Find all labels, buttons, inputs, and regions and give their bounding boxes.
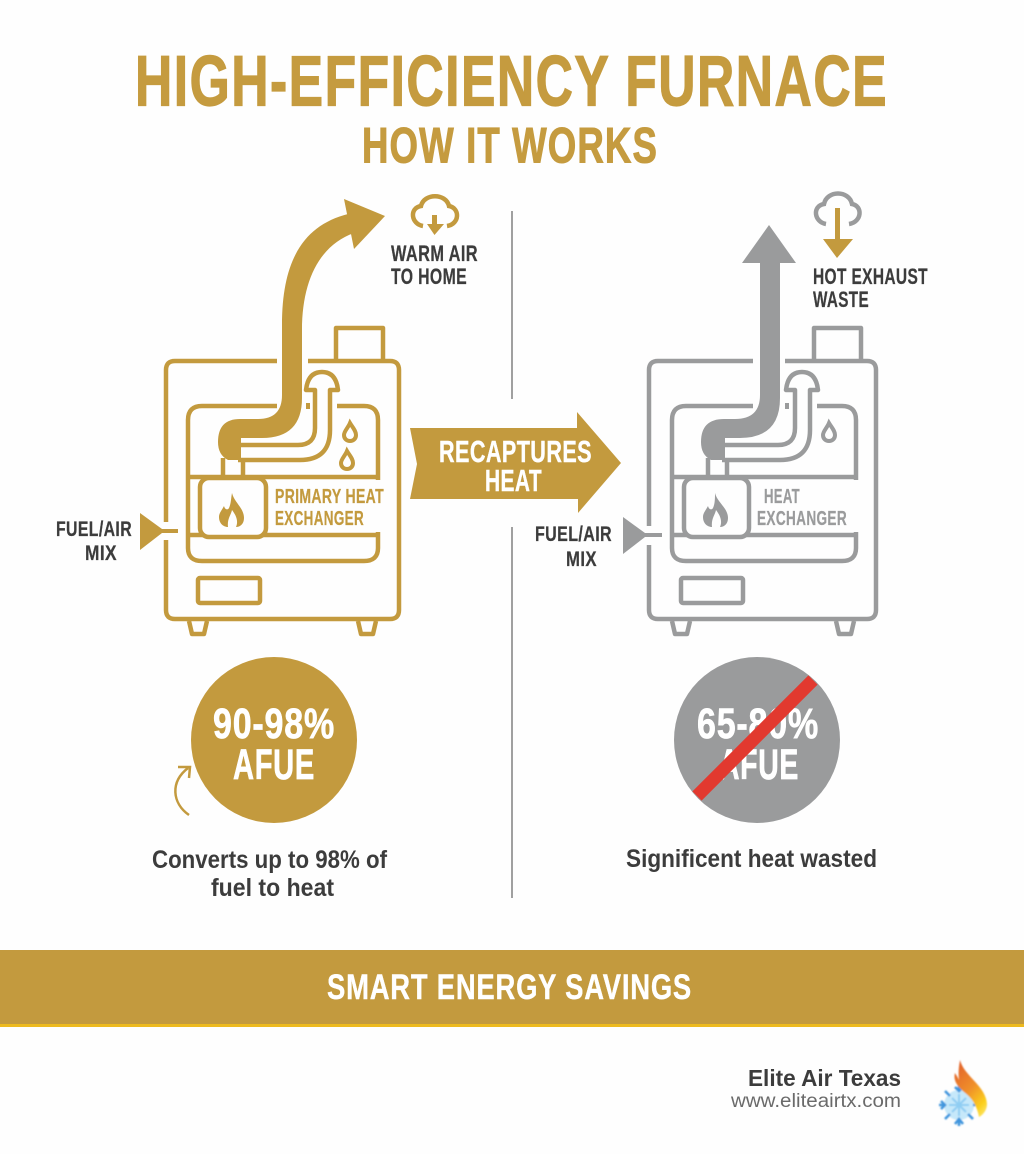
exhaust tube with arrow — [722, 372, 818, 460]
fuel/air label: FUEL/AIR — [535, 523, 612, 546]
fuel/air label: MIX — [566, 548, 597, 571]
droplet — [823, 423, 835, 441]
hot exhaust label: HOT EXHAUST — [813, 264, 928, 289]
AFUE badge with slash: 65-80% — [697, 700, 819, 748]
footer brand: Elite Air Texas — [748, 1065, 901, 1091]
fuel/air label: FUEL/AIR — [56, 518, 132, 541]
caption: fuel to heat — [211, 874, 335, 902]
arrow: recaptures heat — [410, 412, 621, 513]
panel: high-efficiency furnace — [56, 196, 478, 902]
center divider — [511, 211, 513, 898]
icon: curved arrow — [175, 767, 190, 815]
AFUE badge: 90-98% — [213, 700, 335, 748]
banner: SMART ENERGY SAVINGS — [327, 968, 692, 1007]
fuel inlet arrow — [623, 517, 662, 554]
icon: cloud with arrow — [413, 196, 457, 235]
heat exchanger label: HEAT — [764, 486, 800, 508]
heat exchanger label — [752, 480, 859, 532]
subtitle: HOW IT WORKS — [362, 118, 658, 174]
furnace outline — [166, 328, 399, 634]
icon: flame and snowflake logo — [939, 1060, 987, 1126]
warm air label: WARM AIR — [391, 241, 478, 266]
heat exchanger label: EXCHANGER — [757, 508, 847, 530]
burner connectors — [708, 458, 727, 477]
hot exhaust label — [813, 264, 928, 312]
fuel inlet arrow — [140, 513, 178, 550]
AFUE badge: AFUE — [233, 741, 315, 789]
combustion box with flame — [200, 478, 266, 537]
warm air label — [391, 241, 478, 289]
panel: standard furnace — [535, 194, 928, 873]
combustion box with flame — [684, 478, 749, 537]
arrow: recaptures heat: RECAPTURES — [439, 434, 592, 469]
fuel/air label — [535, 523, 612, 571]
footer brand: www.eliteairtx.com — [730, 1091, 901, 1112]
burner connectors — [223, 458, 243, 477]
fuel/air label: MIX — [85, 542, 117, 565]
banner — [0, 950, 1024, 1027]
caption: Significent heat wasted — [626, 845, 877, 873]
AFUE badge with slash — [674, 657, 840, 823]
warm air label: TO HOME — [391, 264, 467, 289]
caption — [152, 846, 388, 902]
footer brand — [730, 1065, 901, 1112]
hot exhaust label: WASTE — [813, 287, 869, 312]
primary heat exchanger label — [270, 480, 384, 532]
warm air pipe and arrow — [218, 199, 385, 460]
droplets — [341, 423, 356, 469]
AFUE badge with slash: AFUE — [719, 741, 799, 789]
primary heat exchanger label: EXCHANGER — [275, 508, 364, 530]
AFUE badge — [191, 657, 357, 823]
arrow: recaptures heat: HEAT — [485, 463, 542, 498]
primary heat exchanger label: PRIMARY HEAT — [275, 486, 384, 508]
furnace outline — [649, 328, 876, 634]
caption: Converts up to 98% of — [152, 846, 388, 874]
exhaust pipe and arrow — [701, 225, 796, 460]
icon: cloud with down arrow — [816, 194, 860, 258]
fuel/air label — [56, 518, 132, 565]
condensing tube with arrow — [238, 372, 338, 460]
